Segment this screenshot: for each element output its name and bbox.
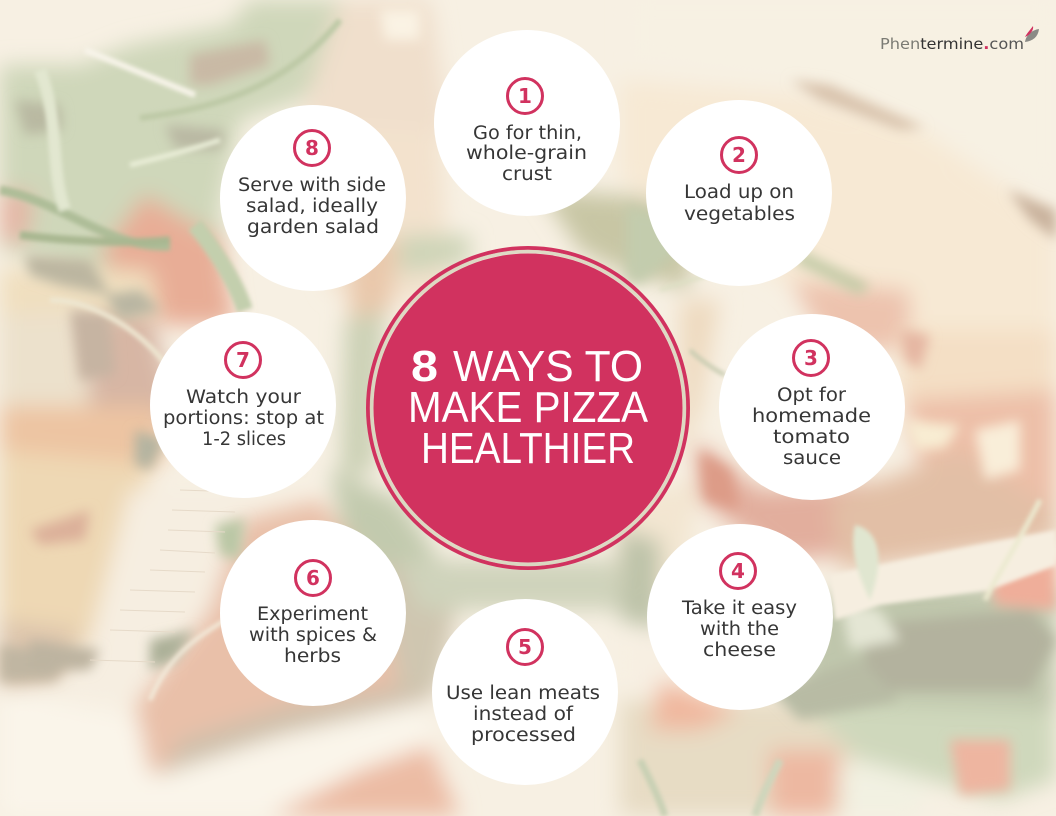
badge 7	[226, 342, 260, 378]
title text: HEALTHIER	[421, 424, 635, 473]
step 8	[220, 105, 406, 291]
logo wordmark: Phentermine .com	[880, 35, 1024, 53]
text 6	[249, 604, 377, 667]
step 5	[432, 599, 618, 785]
badge 5: 5	[518, 635, 532, 659]
icon: leaf	[1025, 26, 1039, 42]
text 4: cheese	[703, 640, 776, 661]
text 7	[163, 387, 324, 450]
text 1: whole-grain	[466, 143, 587, 164]
badge 5	[508, 630, 542, 664]
badge 2: 2	[732, 143, 746, 167]
badge 8: 8	[305, 136, 319, 160]
text 4: with the	[700, 619, 779, 640]
title text: 8	[411, 342, 438, 391]
text 1: Go for thin,	[473, 123, 582, 144]
text 5: processed	[471, 725, 576, 746]
text 2: Load up on	[684, 182, 794, 203]
logo: Phentermine.com	[880, 26, 1039, 53]
step 2	[646, 100, 832, 286]
step 3	[719, 314, 905, 500]
badge 8	[294, 130, 330, 166]
text 3: sauce	[783, 448, 841, 469]
text 5: instead of	[473, 704, 574, 725]
text 1	[466, 123, 587, 185]
text 5: Use lean meats	[446, 683, 600, 704]
title text: WAYS TO	[453, 342, 643, 391]
badge 4	[720, 554, 756, 588]
text 1: crust	[502, 164, 552, 185]
badge 3	[794, 340, 828, 376]
text 3: Opt for	[777, 385, 846, 406]
step 1	[434, 30, 620, 216]
badge 1: 1	[518, 84, 532, 108]
text 3: homemade	[752, 406, 871, 427]
step 6	[220, 520, 406, 706]
badge 4: 4	[731, 559, 745, 583]
text 6: with spices &	[249, 625, 377, 646]
text 7: 1-2 slices	[202, 429, 286, 450]
text 4: Take it easy	[681, 598, 797, 619]
text 3: tomato	[773, 427, 850, 448]
wood grain lines	[90, 490, 240, 662]
center disc	[374, 254, 682, 562]
step 4	[647, 524, 833, 710]
text 8: salad, ideally	[246, 196, 378, 217]
badge 1	[508, 78, 542, 114]
badge 6: 6	[306, 566, 320, 590]
badge 2	[722, 138, 756, 172]
text 2	[684, 182, 795, 225]
title text	[408, 342, 649, 473]
text 8	[238, 175, 386, 238]
text 3	[752, 385, 871, 469]
text 4	[681, 598, 797, 661]
step 7	[150, 312, 336, 498]
text 5	[446, 683, 600, 746]
text 8: Serve with side	[238, 175, 386, 196]
text 2: vegetables	[684, 204, 795, 225]
badge 3: 3	[804, 346, 818, 370]
text 7: Watch your	[186, 387, 301, 408]
text 6: Experiment	[257, 604, 368, 625]
badge 6	[296, 560, 330, 596]
center outer ring	[366, 246, 690, 570]
text 7: portions: stop at	[163, 408, 324, 429]
badge 7: 7	[236, 348, 250, 372]
center circle: title	[366, 246, 690, 570]
ring highlight	[372, 252, 684, 564]
title text: MAKE PIZZA	[408, 383, 649, 432]
text 6: herbs	[284, 646, 341, 667]
text 8: garden salad	[247, 217, 379, 238]
